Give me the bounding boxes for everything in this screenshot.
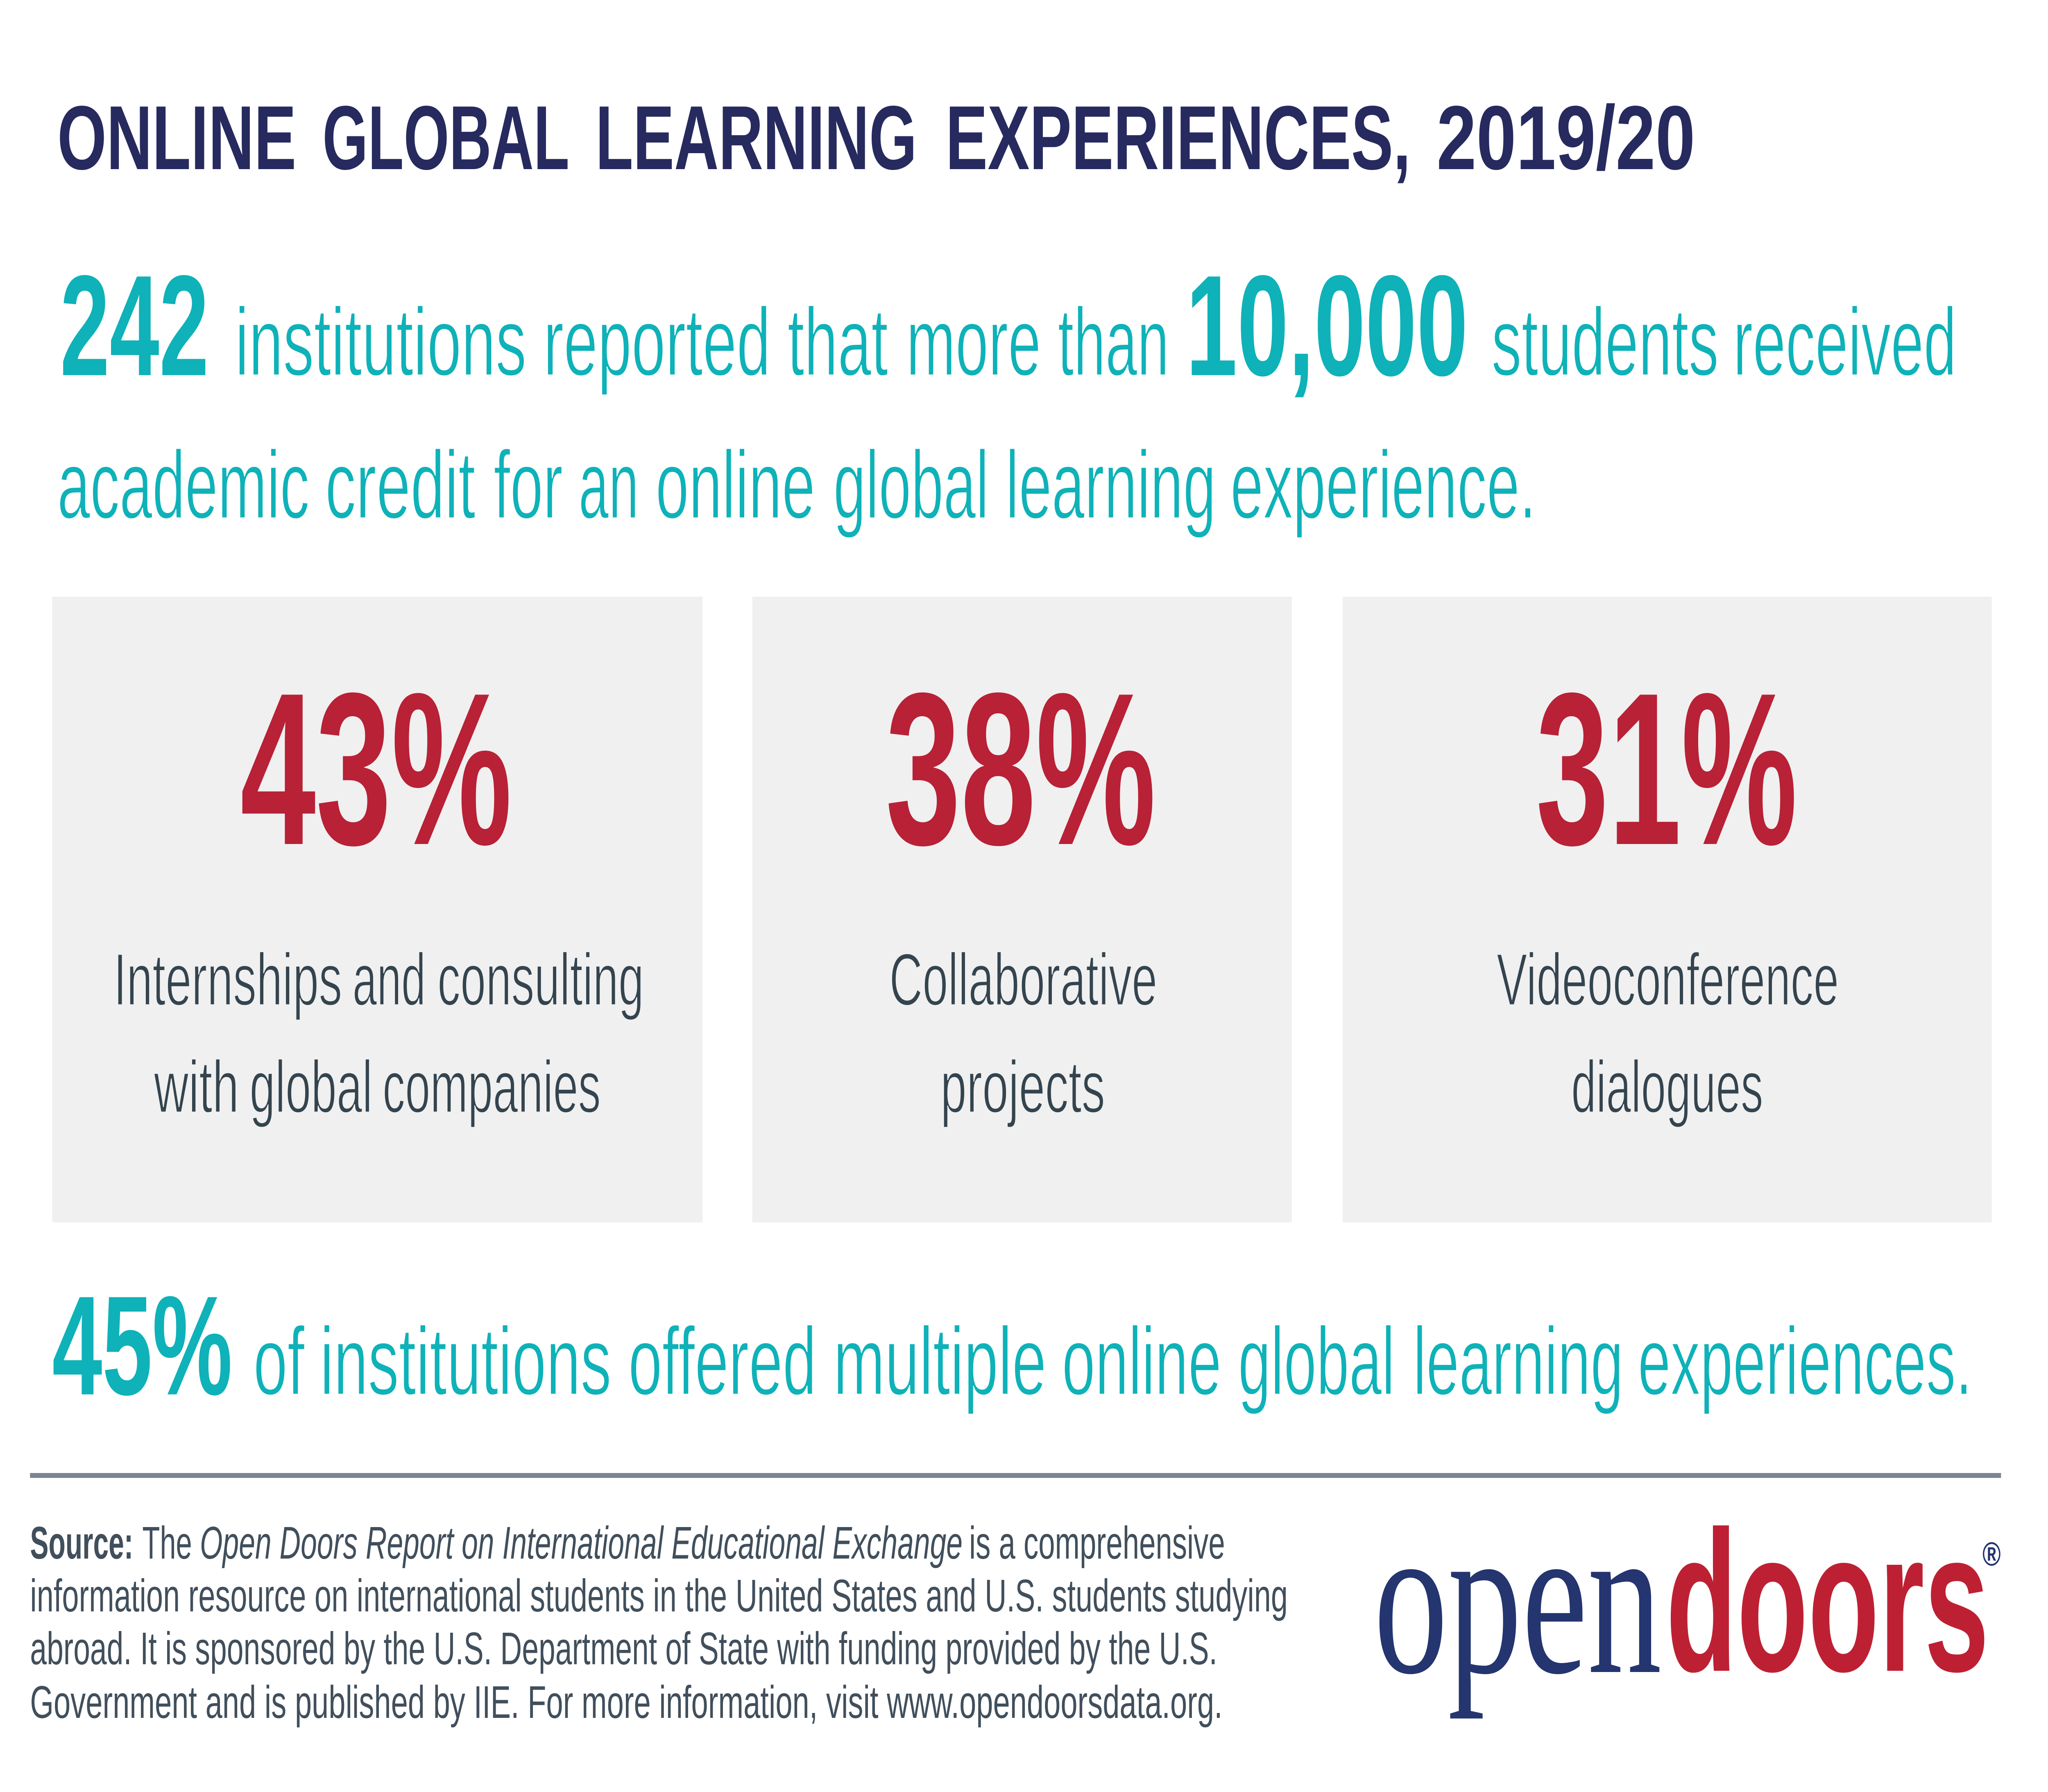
text: academic credit: learning [1006,431,1216,539]
title [57,87,1695,189]
stat: 43%: 43% [240,648,512,890]
label: internships and consulting: companies [383,1046,601,1128]
text: multiple experiences: global [1238,1307,1395,1415]
stat: 242: 242 [60,246,209,406]
logo: open doors: open [1374,1478,1662,1720]
text: multiple experiences [254,1307,1972,1415]
logo: open doors [1374,1478,2001,1720]
text: multiple experiences: online [1062,1307,1221,1415]
text: academic credit [57,431,1536,539]
stat: 31%: 31% [1536,648,1797,890]
logo: open doors: ® [1982,1536,2001,1573]
panel: internships [52,597,702,1222]
text: multiple experiences: multiple [834,1307,1047,1415]
text: institutions reported: than [1058,288,1169,396]
title: LEARNING [596,87,917,189]
stat: 10,000: 10,000 [1186,246,1468,406]
text: multiple experiences: offered [628,1307,816,1415]
label: internships and consulting [113,939,644,1128]
panel: collaborative projects [752,597,1292,1222]
label: videoconference dialogues [1497,939,1839,1128]
label: internships and consulting: and [353,939,426,1021]
text: institutions reported: institutions [235,288,526,396]
text: academic credit: experience. [1230,431,1536,539]
source note: Open Doors Report on International Educational Exchange [200,1517,963,1568]
text: multiple experiences: institutions [320,1307,612,1415]
headline: 242 institutions, 10,000 students [57,246,1957,539]
stat: 38%: 38% [886,648,1156,890]
text: academic credit: an [579,431,639,539]
label: collaborative projects: projects [940,1046,1105,1128]
text: students received: received [1733,288,1957,396]
text: multiple experiences: of [254,1307,305,1415]
label: videoconference dialogues: dialogues [1571,1046,1763,1128]
source note: information resource on international students in the United States and U.S. students studying [30,1570,1288,1621]
text: students received: students [1491,288,1719,396]
label: collaborative projects [889,939,1157,1128]
text: academic credit: academic [57,431,309,539]
source note: Source: [30,1517,133,1568]
text: academic credit: online [656,431,815,539]
text: students received [1491,288,1957,396]
logo: open doors: doors [1666,1489,1989,1713]
text: institutions reported: more [906,288,1041,396]
title: ONLINE [57,87,296,189]
text: multiple experiences: learning [1413,1307,1623,1415]
label: internships and consulting: global [249,1046,372,1128]
label: internships and consulting: consulting [437,939,644,1021]
title: EXPERIENCES, [946,87,1411,189]
source note: The [142,1517,192,1568]
source note: abroad. It is sponsored by the U.S. Department of State with funding provided by the U.S. [30,1623,1217,1674]
panel: videoconference dialogues [1343,597,1992,1222]
text: academic credit: global [834,431,989,539]
label: internships and consulting: with [154,1046,239,1128]
label: videoconference dialogues: Videoconference [1497,939,1839,1021]
text: institutions reported: that [788,288,888,396]
callout: 45% of institutions [52,1267,1972,1425]
text: academic credit: for [494,431,563,539]
source note: is a comprehensive [969,1517,1225,1568]
title: 2019/20 [1436,87,1695,189]
label: internships and consulting: Internships [113,939,342,1021]
text: academic credit: credit [325,431,476,539]
source note [30,1517,1288,1728]
text: institutions reported: reported [544,288,770,396]
title: GLOBAL [322,87,569,189]
label: collaborative projects: Collaborative [889,939,1157,1021]
stat: 45%: 45% [52,1267,232,1425]
source note: Government and is published by IIE. For more information, visit www.opendoorsdata.org. [30,1677,1223,1728]
text: institutions reported [235,288,1169,396]
text: multiple experiences: experiences. [1638,1307,1972,1415]
